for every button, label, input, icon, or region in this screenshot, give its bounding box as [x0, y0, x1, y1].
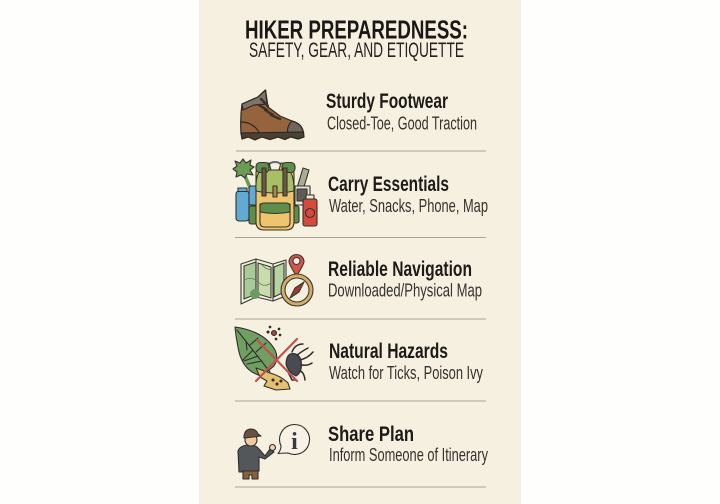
description: Downloaded/Physical Map	[328, 280, 482, 301]
panel: natural hazards	[235, 326, 484, 390]
icon glyph: info letter: i	[291, 429, 298, 455]
heading: Share Plan	[328, 423, 414, 446]
panel: carry essentials	[233, 159, 488, 230]
panel: reliable navigation	[241, 254, 482, 306]
panel: cream background	[199, 0, 521, 504]
description: Watch for Ticks, Poison Ivy	[329, 362, 484, 383]
description: Water, Snacks, Phone, Map	[329, 195, 488, 216]
icon: leaf, tick and crossed-out hazard	[235, 326, 313, 390]
description: Inform Someone of Itinerary	[329, 444, 489, 465]
title	[245, 14, 468, 62]
heading: Natural Hazards	[329, 340, 448, 363]
heading: Carry Essentials	[328, 173, 449, 196]
title: HIKER PREPAREDNESS:	[245, 14, 468, 44]
description: Closed-Toe, Good Traction	[327, 112, 477, 134]
icon: map, pin and compass	[241, 254, 313, 306]
icon: person with information bubble	[238, 424, 310, 479]
heading: Reliable Navigation	[328, 258, 472, 281]
title: SAFETY, GEAR, AND ETIQUETTE	[249, 39, 464, 62]
panel: share plan	[238, 423, 489, 479]
heading: Sturdy Footwear	[326, 90, 448, 113]
icon: hiking boot	[241, 90, 304, 140]
icon: backpack with supplies	[233, 159, 317, 230]
panel: sturdy footwear	[241, 90, 477, 140]
